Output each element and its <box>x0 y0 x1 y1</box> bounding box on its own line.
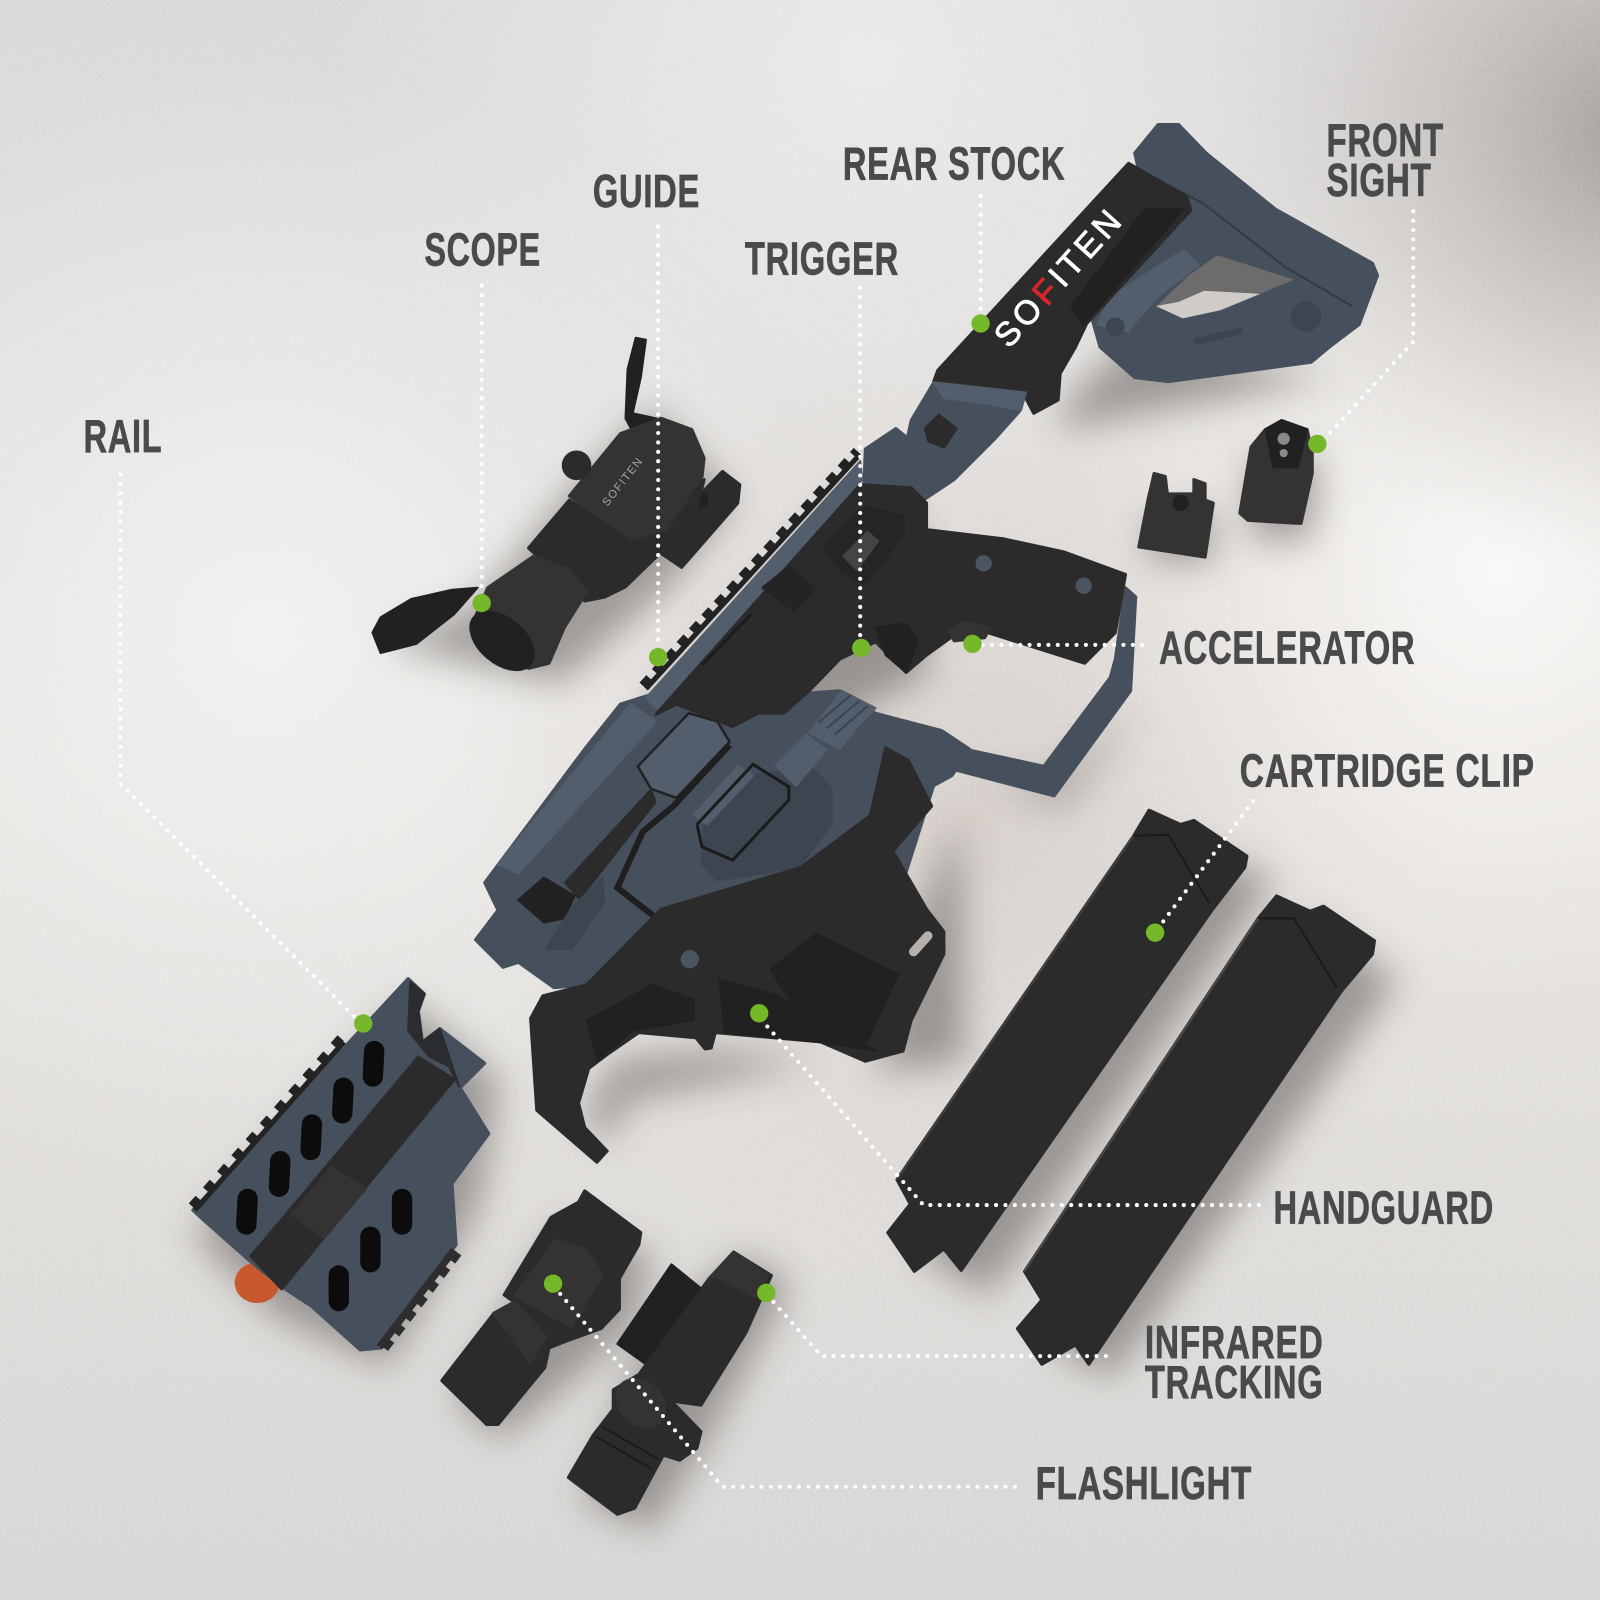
marker rear stock <box>971 314 990 333</box>
front rod <box>498 704 656 873</box>
label rear stock: REAR STOCK <box>843 138 1065 190</box>
callout: flashlight <box>544 1274 1252 1509</box>
marker infrared tracking <box>757 1284 776 1302</box>
label infrared tracking: TRACKING <box>1145 1356 1323 1408</box>
part: flashlights <box>442 1191 771 1514</box>
part: magazines <box>888 810 1374 1364</box>
marker scope <box>472 594 491 612</box>
callout: front sight <box>1308 114 1444 453</box>
magazine one <box>888 810 1247 1271</box>
leader rail <box>120 474 354 1016</box>
callout: rear stock <box>843 138 1065 333</box>
callout: infrared tracking <box>757 1284 1323 1408</box>
marker accelerator <box>963 635 982 653</box>
strap <box>251 1057 454 1289</box>
marker rail <box>354 1014 372 1033</box>
lower body black <box>531 748 944 1162</box>
callout: guide <box>593 165 700 666</box>
part: gun main body <box>476 429 1136 1162</box>
marker front sight <box>1308 435 1327 453</box>
label flashlight: FLASHLIGHT <box>1036 1457 1252 1509</box>
leader guide <box>656 227 660 648</box>
label accelerator: ACCELERATOR <box>1159 621 1415 673</box>
leader rear stock <box>979 196 983 314</box>
callout: cartridge clip <box>1146 745 1535 942</box>
scope cube body <box>569 418 704 539</box>
lower receiver blue <box>476 691 969 988</box>
leader trigger <box>858 288 862 638</box>
butt pad highlight <box>1138 168 1352 306</box>
leader flashlight <box>560 1294 1015 1487</box>
lower receiver details <box>638 713 730 798</box>
upper slots <box>236 1040 412 1311</box>
label front sight: FRONT <box>1327 114 1444 166</box>
objective lens <box>472 556 587 668</box>
marker cartridge clip <box>1146 923 1164 942</box>
flip cap left <box>372 588 478 653</box>
stock black body <box>934 163 1191 413</box>
part: front sights <box>1139 420 1312 557</box>
leader cartridge clip <box>1163 801 1253 921</box>
part: scope <box>372 338 740 682</box>
label guide: GUIDE <box>593 165 700 217</box>
marker guide <box>649 648 667 666</box>
callout: handguard <box>750 1004 1494 1233</box>
sight left <box>1139 473 1213 557</box>
upper receiver black <box>656 485 1126 727</box>
flashlight left <box>442 1191 641 1424</box>
rail strip <box>646 461 862 709</box>
callout: accelerator <box>963 621 1415 673</box>
magazine two <box>1017 896 1374 1364</box>
stock butt frame <box>1090 124 1378 382</box>
bottom rail teeth <box>380 1250 454 1347</box>
blue upper shoulder <box>862 429 934 536</box>
label infrared tracking: INFRARED <box>1145 1316 1323 1368</box>
rail block body <box>193 979 489 1350</box>
flashlight right mount <box>617 1264 704 1369</box>
scope mid section <box>529 480 704 601</box>
leader scope <box>480 286 484 594</box>
callout: trigger <box>745 232 899 657</box>
callout: scope <box>424 223 541 612</box>
label scope: SCOPE <box>424 223 541 275</box>
scope brand text: SOFITEN <box>600 455 646 509</box>
callout: rail <box>84 410 372 1033</box>
leader infrared tracking <box>773 1302 1112 1356</box>
top rail teeth <box>195 1042 344 1210</box>
trigger stirrup blue <box>957 588 1136 796</box>
part: rear stock <box>898 124 1378 500</box>
mount <box>653 471 740 567</box>
label rail: RAIL <box>84 410 162 462</box>
soft shadows <box>194 337 1398 1531</box>
flip cap up <box>626 338 656 432</box>
marker trigger <box>852 639 870 657</box>
label trigger: TRIGGER <box>745 232 899 284</box>
orange tip <box>235 1262 280 1303</box>
label front sight: SIGHT <box>1327 154 1432 206</box>
sight right <box>1240 420 1312 523</box>
stock logo: SOFITEN <box>987 200 1132 355</box>
leader front sight <box>1327 211 1413 437</box>
buffer tube <box>898 383 1026 500</box>
marker handguard <box>750 1004 768 1022</box>
flashlight right <box>568 1252 771 1514</box>
label handguard: HANDGUARD <box>1273 1181 1494 1233</box>
part: rail block <box>192 979 489 1350</box>
leader accelerator <box>983 643 1148 647</box>
leader handguard <box>767 1027 1265 1205</box>
marker flashlight <box>544 1274 562 1293</box>
